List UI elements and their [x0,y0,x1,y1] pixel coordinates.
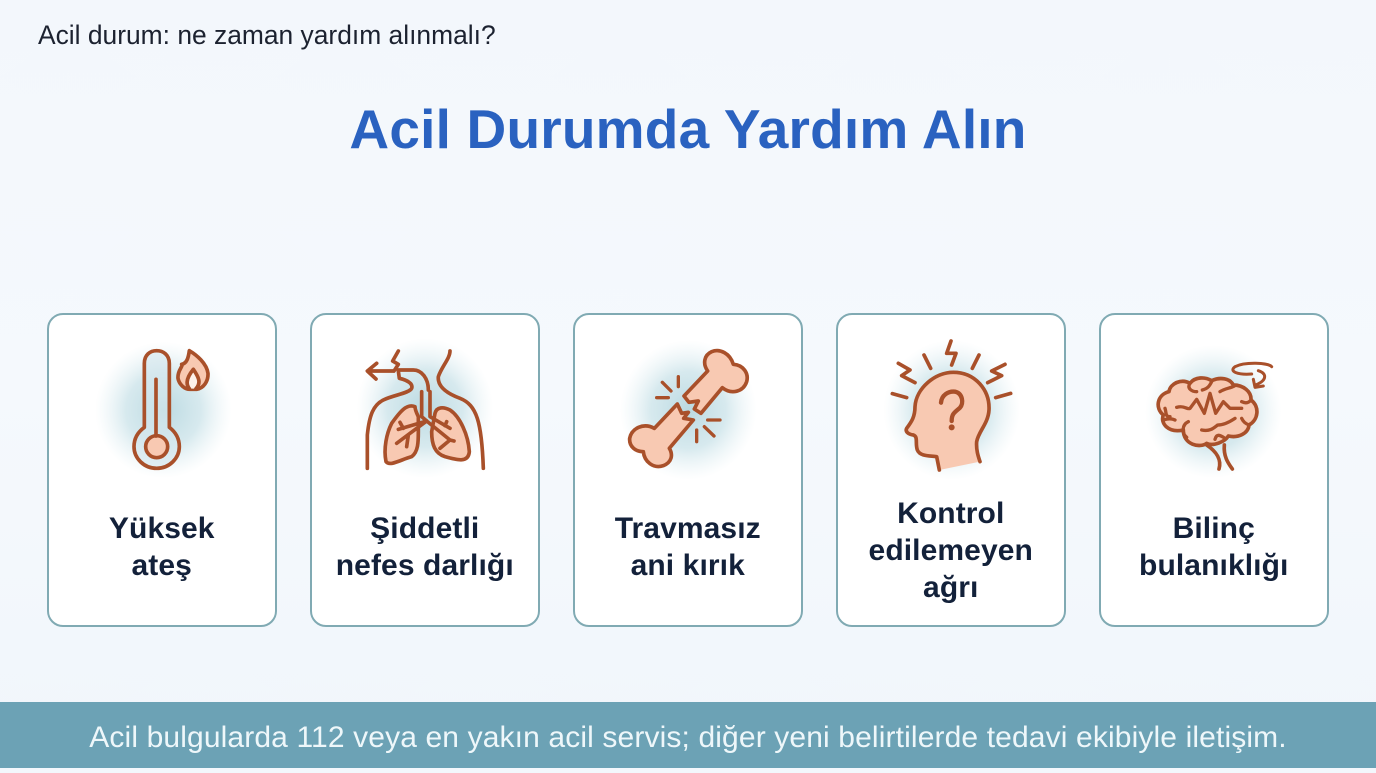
label: kontrol edilemeyen ağrı: edilemeyen [869,534,1033,567]
title: Acil Durumda Yardım Alın [349,98,1027,160]
panel: bilinç bulanıklığı [1099,313,1328,626]
label: yüksek ateş [109,512,215,582]
label: bilinç bulanıklığı: bulanıklığı [1139,549,1288,582]
icon: head with question mark and pain marks [883,340,1020,480]
subtitle: Acil durum: ne zaman yardım alınmalı? [38,20,496,50]
panel: travmasız ani kırık [573,313,802,626]
panel: şiddetli nefes darlığı [310,313,540,626]
label: yüksek ateş: ateş [132,549,192,582]
label: şiddetli nefes darlığı [336,512,514,582]
label: travmasız ani kırık [615,512,761,582]
footer banner: Acil bulgularda 112 veya en yakın acil servis; diğer yeni belirtilerde tedavi ekibiyle iletişim. [89,721,1287,754]
panel: kontrol edilemeyen ağrı [836,313,1066,626]
label: travmasız ani kırık: Travmasız [615,512,761,545]
label: travmasız ani kırık: ani kırık [631,549,745,582]
label: bilinç bulanıklığı: Bilinç [1173,512,1255,545]
label: kontrol edilemeyen ağrı: ağrı [923,571,978,604]
label: kontrol edilemeyen ağrı [869,497,1033,604]
panel: yüksek ateş [47,313,276,626]
label: kontrol edilemeyen ağrı: Kontrol [897,497,1004,530]
label: yüksek ateş: Yüksek [109,512,215,545]
footer banner [0,702,1376,768]
label: şiddetli nefes darlığı: nefes darlığı [336,549,514,582]
icon: broken bone [620,340,757,480]
icon: brain with dizziness swirl [1145,345,1282,478]
icon: lungs with breath arrow [357,338,493,478]
label: şiddetli nefes darlığı: Şiddetli [370,512,479,545]
label: bilinç bulanıklığı [1139,512,1288,582]
icon: thermometer with flame [95,342,232,478]
